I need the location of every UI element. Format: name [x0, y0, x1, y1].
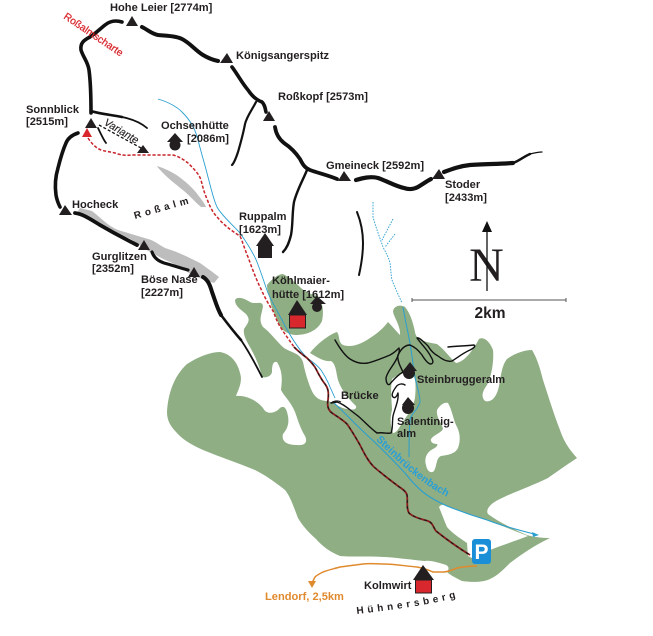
- label: Gurglitzen: [2352m]: [92, 263, 134, 275]
- red summit marker: [82, 128, 92, 137]
- label: Salentinigalm: Salentinig-: [397, 416, 454, 428]
- label: Sonnblick: Sonnblick: [26, 104, 79, 116]
- hiking trail: lower dark section: [294, 347, 470, 555]
- Steinbrückenbach stream: [333, 402, 534, 534]
- dotted tributaries: [373, 202, 402, 303]
- label: Ruppalm: [1623m]: [239, 224, 281, 236]
- label: Lendorf: Lendorf, 2,5km: [265, 591, 344, 603]
- upper stream: [158, 99, 335, 398]
- hut: Ochsenhütte: [167, 133, 183, 150]
- label: Hocheck: Hocheck: [72, 199, 119, 211]
- label: Steinbruggeralm: Steinbruggeralm: [417, 374, 505, 386]
- label: Steinbrückenbach: Steinbrückenbach: [377, 436, 448, 496]
- label: Brücke: Brücke: [341, 390, 379, 402]
- hut: Kolmwirt: [413, 565, 434, 593]
- bridge: [331, 401, 341, 403]
- label: Böse Nase: [2227m]: [141, 287, 183, 299]
- forest patch at Köhlmaierhütte: [267, 274, 323, 335]
- mountain ridges: [55, 21, 542, 377]
- parking sign: P: [474, 541, 489, 564]
- stream arrowhead: [532, 532, 539, 537]
- label: Kolmwirt: Kolmwirt: [364, 580, 412, 592]
- hut: small alm at Köhlmaierhütte: [310, 296, 326, 312]
- label: Salentinigalm: alm: [397, 428, 416, 440]
- road to Lendorf: [312, 564, 477, 583]
- north arrow: N: [469, 239, 504, 292]
- hut: Köhlmaierhütte: [288, 300, 307, 328]
- label: Sonnblick: [2515m]: [26, 116, 68, 128]
- label: Ruppalm: Ruppalm: [239, 211, 286, 223]
- label: Gurglitzen: Gurglitzen: [92, 251, 147, 263]
- label: Hühnersberg: Hühnersberg: [356, 592, 456, 614]
- variant trail: [99, 125, 141, 148]
- forest roads: [331, 338, 475, 433]
- label: Ochsenhütte: [2086m]: [187, 133, 229, 145]
- label: Böse Nase: Böse Nase: [141, 274, 198, 286]
- label: Gmeineck: Gmeineck [2592m]: [326, 160, 424, 172]
- label: Stoder: [2433m]: [445, 192, 487, 204]
- hut: Salentinigalm: [402, 397, 415, 414]
- scale bar: 2km: [474, 305, 506, 322]
- label: Köhlmaierhütte: Köhlmaier-: [272, 275, 330, 287]
- hiking trail: upper red dashed section: [88, 138, 294, 347]
- hut: Steinbruggeralm: [403, 362, 417, 379]
- label: Variante: Variante: [101, 117, 142, 146]
- peak triangles: [59, 16, 445, 277]
- scale bar: [412, 298, 566, 322]
- label: Stoder: Stoder: [445, 179, 480, 191]
- side stream: [403, 307, 420, 457]
- label: Königsangerspitz: Königsangerspitz: [236, 50, 330, 62]
- label: Ochsenhütte: Ochsenhütte: [161, 120, 229, 132]
- grey scree: Gurglitzen: [77, 208, 219, 283]
- parking sign: [472, 539, 491, 564]
- label: Roßalm: Roßalm: [133, 195, 194, 222]
- label: Roßalmscharte: Roßalmscharte: [61, 11, 125, 59]
- forest area: [167, 298, 577, 582]
- label: Köhlmaierhütte: hütte [1612m]: [272, 289, 344, 301]
- grey scree: Roßalm: [157, 166, 206, 207]
- hut: Ruppalm: [256, 233, 274, 258]
- label: Hohe Leier: Hohe Leier [2774m]: [110, 2, 213, 14]
- road arrowhead: [308, 581, 316, 588]
- label: Roßkopf: Roßkopf [2573m]: [278, 91, 368, 103]
